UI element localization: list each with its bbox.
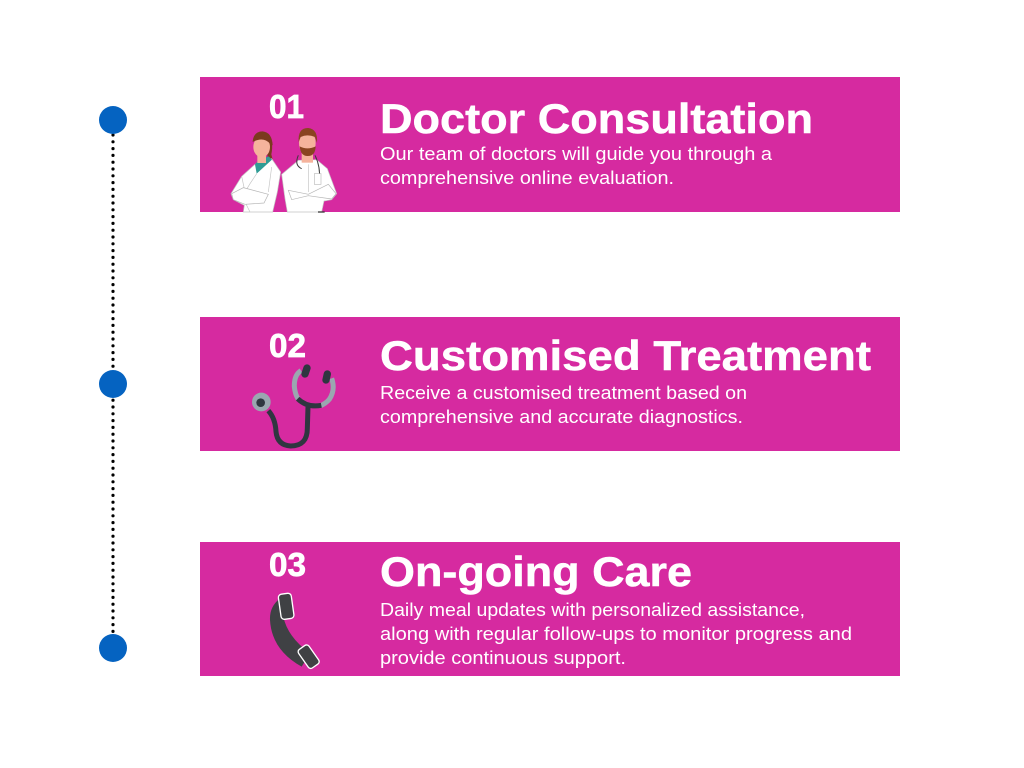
description: Our team of doctors will guide you through a xyxy=(380,144,773,164)
description xyxy=(380,383,747,427)
number 01: 01 xyxy=(269,88,304,125)
marker: step 3 xyxy=(99,634,127,662)
icon: stethoscope xyxy=(252,368,333,446)
description xyxy=(380,600,852,668)
panel: Doctor Consultation xyxy=(200,77,900,213)
heading: Customised Treatment xyxy=(380,332,871,379)
number 02: 02 xyxy=(269,327,306,364)
description: comprehensive online evaluation. xyxy=(380,168,674,188)
heading: On-going Care xyxy=(380,548,692,595)
number 03: 03 xyxy=(269,546,306,583)
panel: On-going Care xyxy=(200,542,900,676)
description xyxy=(380,144,773,188)
description: Daily meal updates with personalized assistance, xyxy=(380,600,805,620)
marker: step 2 xyxy=(99,370,127,398)
icon: telephone handset xyxy=(270,593,320,670)
icon: two doctors xyxy=(231,128,337,213)
heading: Doctor Consultation xyxy=(380,95,813,142)
description: along with regular follow-ups to monitor progress and xyxy=(380,624,852,644)
description: comprehensive and accurate diagnostics. xyxy=(380,407,743,427)
timeline: dotted line with three markers xyxy=(99,106,127,662)
description: Receive a customised treatment based on xyxy=(380,383,747,403)
panel: Customised Treatment xyxy=(200,317,900,451)
description: provide continuous support. xyxy=(380,648,626,668)
marker: step 1 xyxy=(99,106,127,134)
